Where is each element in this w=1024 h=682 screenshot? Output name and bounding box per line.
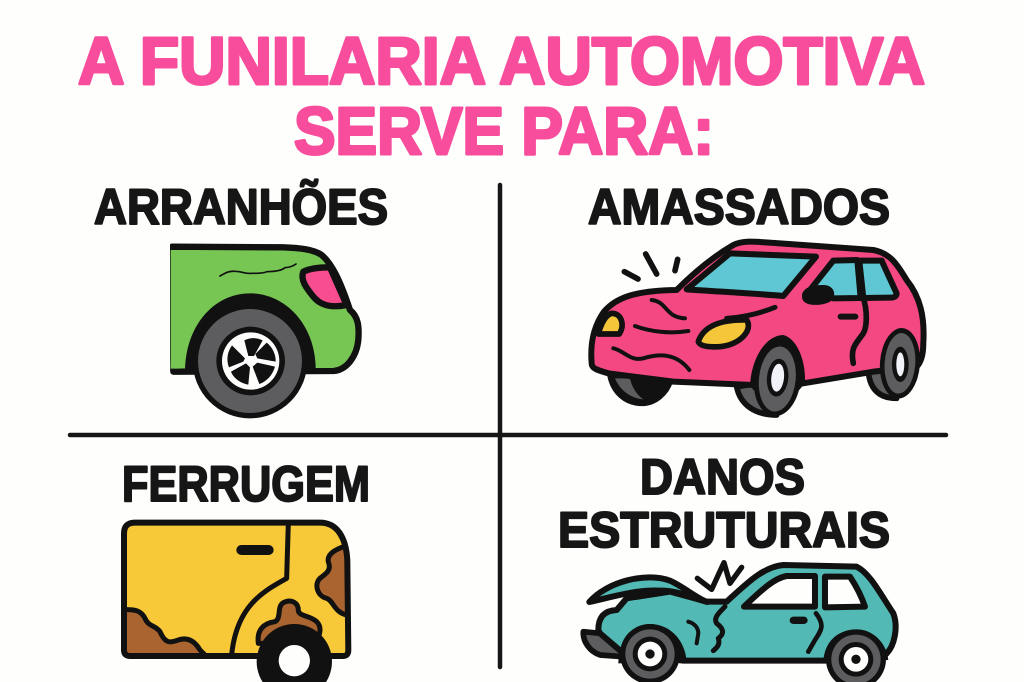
icon: green car rear with scratch [163, 240, 359, 418]
wheel [193, 304, 307, 418]
panel: danos estruturais [558, 449, 896, 682]
icon: yellow door with rust [120, 523, 353, 682]
panel: ferrugem [120, 456, 370, 682]
panel: arranhoes [94, 178, 388, 418]
front wheel [750, 335, 805, 397]
heading: ferrugem: FERRUGEM [122, 456, 370, 512]
panel: amassados [588, 179, 924, 419]
windshield [687, 253, 816, 296]
title [78, 24, 925, 169]
heading: danos estruturais: DANOS [640, 449, 805, 505]
rear wheel [882, 329, 919, 377]
front wheel [618, 624, 687, 682]
outline [124, 523, 348, 656]
title: SERVE PARA: [294, 94, 714, 169]
wheel [257, 624, 332, 682]
door line and handle [852, 298, 866, 363]
heading: amassados: AMASSADOS [588, 179, 890, 235]
icon: teal crashed car [583, 563, 896, 682]
dents [652, 300, 685, 318]
quadrant divider lines [70, 185, 946, 667]
impact zigzag [697, 563, 742, 589]
crack [713, 607, 725, 651]
rear wheel [823, 629, 888, 682]
heading: danos estruturais [558, 449, 890, 558]
title: A FUNILARIA AUTOMOTIVA [78, 24, 925, 99]
heading: danos estruturais: ESTRUTURAIS [558, 502, 890, 558]
rust patches [127, 544, 345, 653]
mirror [802, 285, 834, 305]
heading: arranhoes: ARRANHÕES [94, 178, 388, 235]
front left wheel [610, 375, 671, 403]
hood raised [589, 577, 707, 602]
side windows [810, 260, 861, 298]
rear wheel back [868, 370, 900, 398]
bumper [583, 632, 627, 657]
door handle and seam [793, 609, 804, 631]
headlights [598, 313, 622, 334]
impact marks [624, 254, 678, 279]
icon: pink car with dents [591, 242, 924, 419]
front wheel back [737, 380, 780, 415]
body [598, 565, 896, 661]
door seam and handle [232, 523, 288, 655]
body [591, 242, 924, 385]
windows [744, 576, 815, 607]
